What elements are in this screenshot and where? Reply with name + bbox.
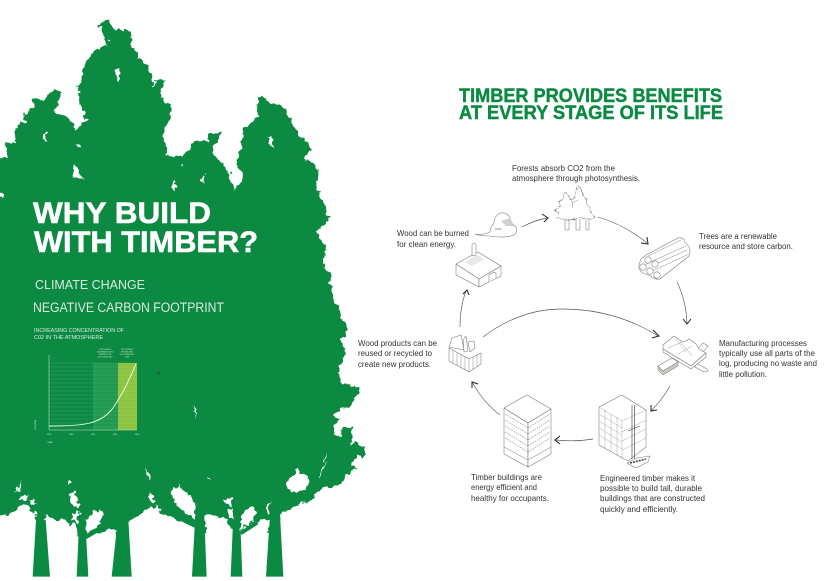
co2 line chart: CO2 (PPM) [35, 420, 37, 430]
main title [33, 197, 258, 259]
right title: AT EVERY STAGE OF ITS LIFE [459, 103, 723, 124]
text: wood products: Wood products can be [358, 338, 437, 348]
text: wood products: reused or recycled to [358, 348, 432, 358]
icon: cloud: CO2 [495, 227, 502, 231]
co2 line chart: 2100 [135, 434, 140, 436]
icon: trees [555, 185, 595, 230]
arrow: construction to buildings [555, 436, 593, 444]
arrow: buildings to reuse [472, 382, 500, 415]
text: manufacturing: log, producing no waste and [719, 358, 817, 368]
text: timber buildings: healthy for occupants. [471, 493, 549, 503]
co2 line chart: CO2 LEVELS [121, 349, 134, 351]
text: clean energy [397, 228, 469, 249]
co2 line chart [35, 349, 140, 444]
co2 line chart: 1950 [91, 434, 96, 436]
text: trees: Trees are a renewable [699, 231, 777, 241]
icon: factory [456, 244, 501, 287]
text: trees [699, 231, 793, 251]
text: timber buildings: energy efficient and [471, 482, 537, 492]
stray mark: 0 [157, 371, 160, 377]
text: engineered timber: possible to build tall, durable [600, 483, 702, 493]
right title [459, 86, 723, 124]
text: clean energy: for clean energy. [397, 239, 456, 249]
co2 line chart: YEAR [47, 441, 53, 444]
arrow: manufacturing to construction [651, 386, 670, 411]
main title: WHY BUILD [33, 197, 211, 230]
arrow: reuse to energy [460, 290, 469, 327]
tree silhouette [0, 19, 365, 577]
text: engineered timber: quickly and efficiently. [600, 504, 678, 514]
text: engineered timber: Engineered timber makes it [600, 473, 696, 483]
icon: recycling bin [449, 335, 481, 372]
co2 line chart: DURING THE [99, 354, 112, 356]
text: manufacturing: little pollution. [719, 369, 767, 379]
text: manufacturing: Manufacturing processes [719, 338, 807, 348]
text: forests: Forests absorb CO2 from the [512, 163, 615, 173]
text: wood products [358, 338, 437, 369]
co2 line chart: 20TH CENTURY [97, 356, 113, 358]
co2 line chart: PROJECTED [121, 352, 134, 354]
text: timber buildings: Timber buildings are [471, 472, 542, 482]
subtitle: climate change: CLIMATE CHANGE [35, 277, 145, 292]
arrow: logs to manufacturing [677, 282, 691, 324]
co2 line chart: INCREASED 30% [97, 350, 113, 354]
arrow: energy to forest [522, 214, 548, 227]
text: engineered timber [600, 473, 705, 514]
text: clean energy: Wood can be burned [397, 228, 469, 238]
text: timber buildings [471, 472, 549, 503]
co2 line chart: TO DOUBLE BY [120, 354, 135, 356]
co2 line chart: 1750 [47, 434, 52, 436]
text: wood products: create new products. [358, 359, 431, 369]
co2 line chart: 2050 [113, 434, 118, 436]
co2 line chart: CO2 LEVELS [99, 349, 112, 351]
subtitle: negative carbon footprint: NEGATIVE CARBON FOOTPRINT [33, 300, 224, 315]
arrow: recycled wood to manufacturing [483, 309, 659, 338]
text: forests [512, 163, 640, 183]
text: manufacturing [719, 338, 817, 379]
main title: WITH TIMBER? [34, 226, 258, 259]
co2 line chart: 1850 [69, 434, 74, 436]
chart heading [34, 328, 125, 341]
chart heading: INCREASING CONCENTRATION OF [34, 328, 125, 334]
text: forests: atmosphere through photosynthesis. [512, 173, 640, 183]
icon: finished building [504, 395, 551, 467]
text: manufacturing: typically use all parts of the [719, 348, 815, 358]
right title: TIMBER PROVIDES BENEFITS [459, 86, 722, 107]
co2 line chart: 2100 [125, 356, 130, 358]
arrow: forest to logs [598, 217, 648, 244]
icon: sawmill [658, 336, 708, 375]
text: engineered timber: buildings that are constructed [600, 493, 705, 503]
chart heading: C02 IN THE ATMOSPHERE [34, 335, 103, 341]
icon: construction site [599, 395, 650, 468]
icon: logs [639, 238, 690, 279]
text: trees: resource and store carbon. [699, 241, 793, 251]
icon: cloud [475, 213, 517, 237]
